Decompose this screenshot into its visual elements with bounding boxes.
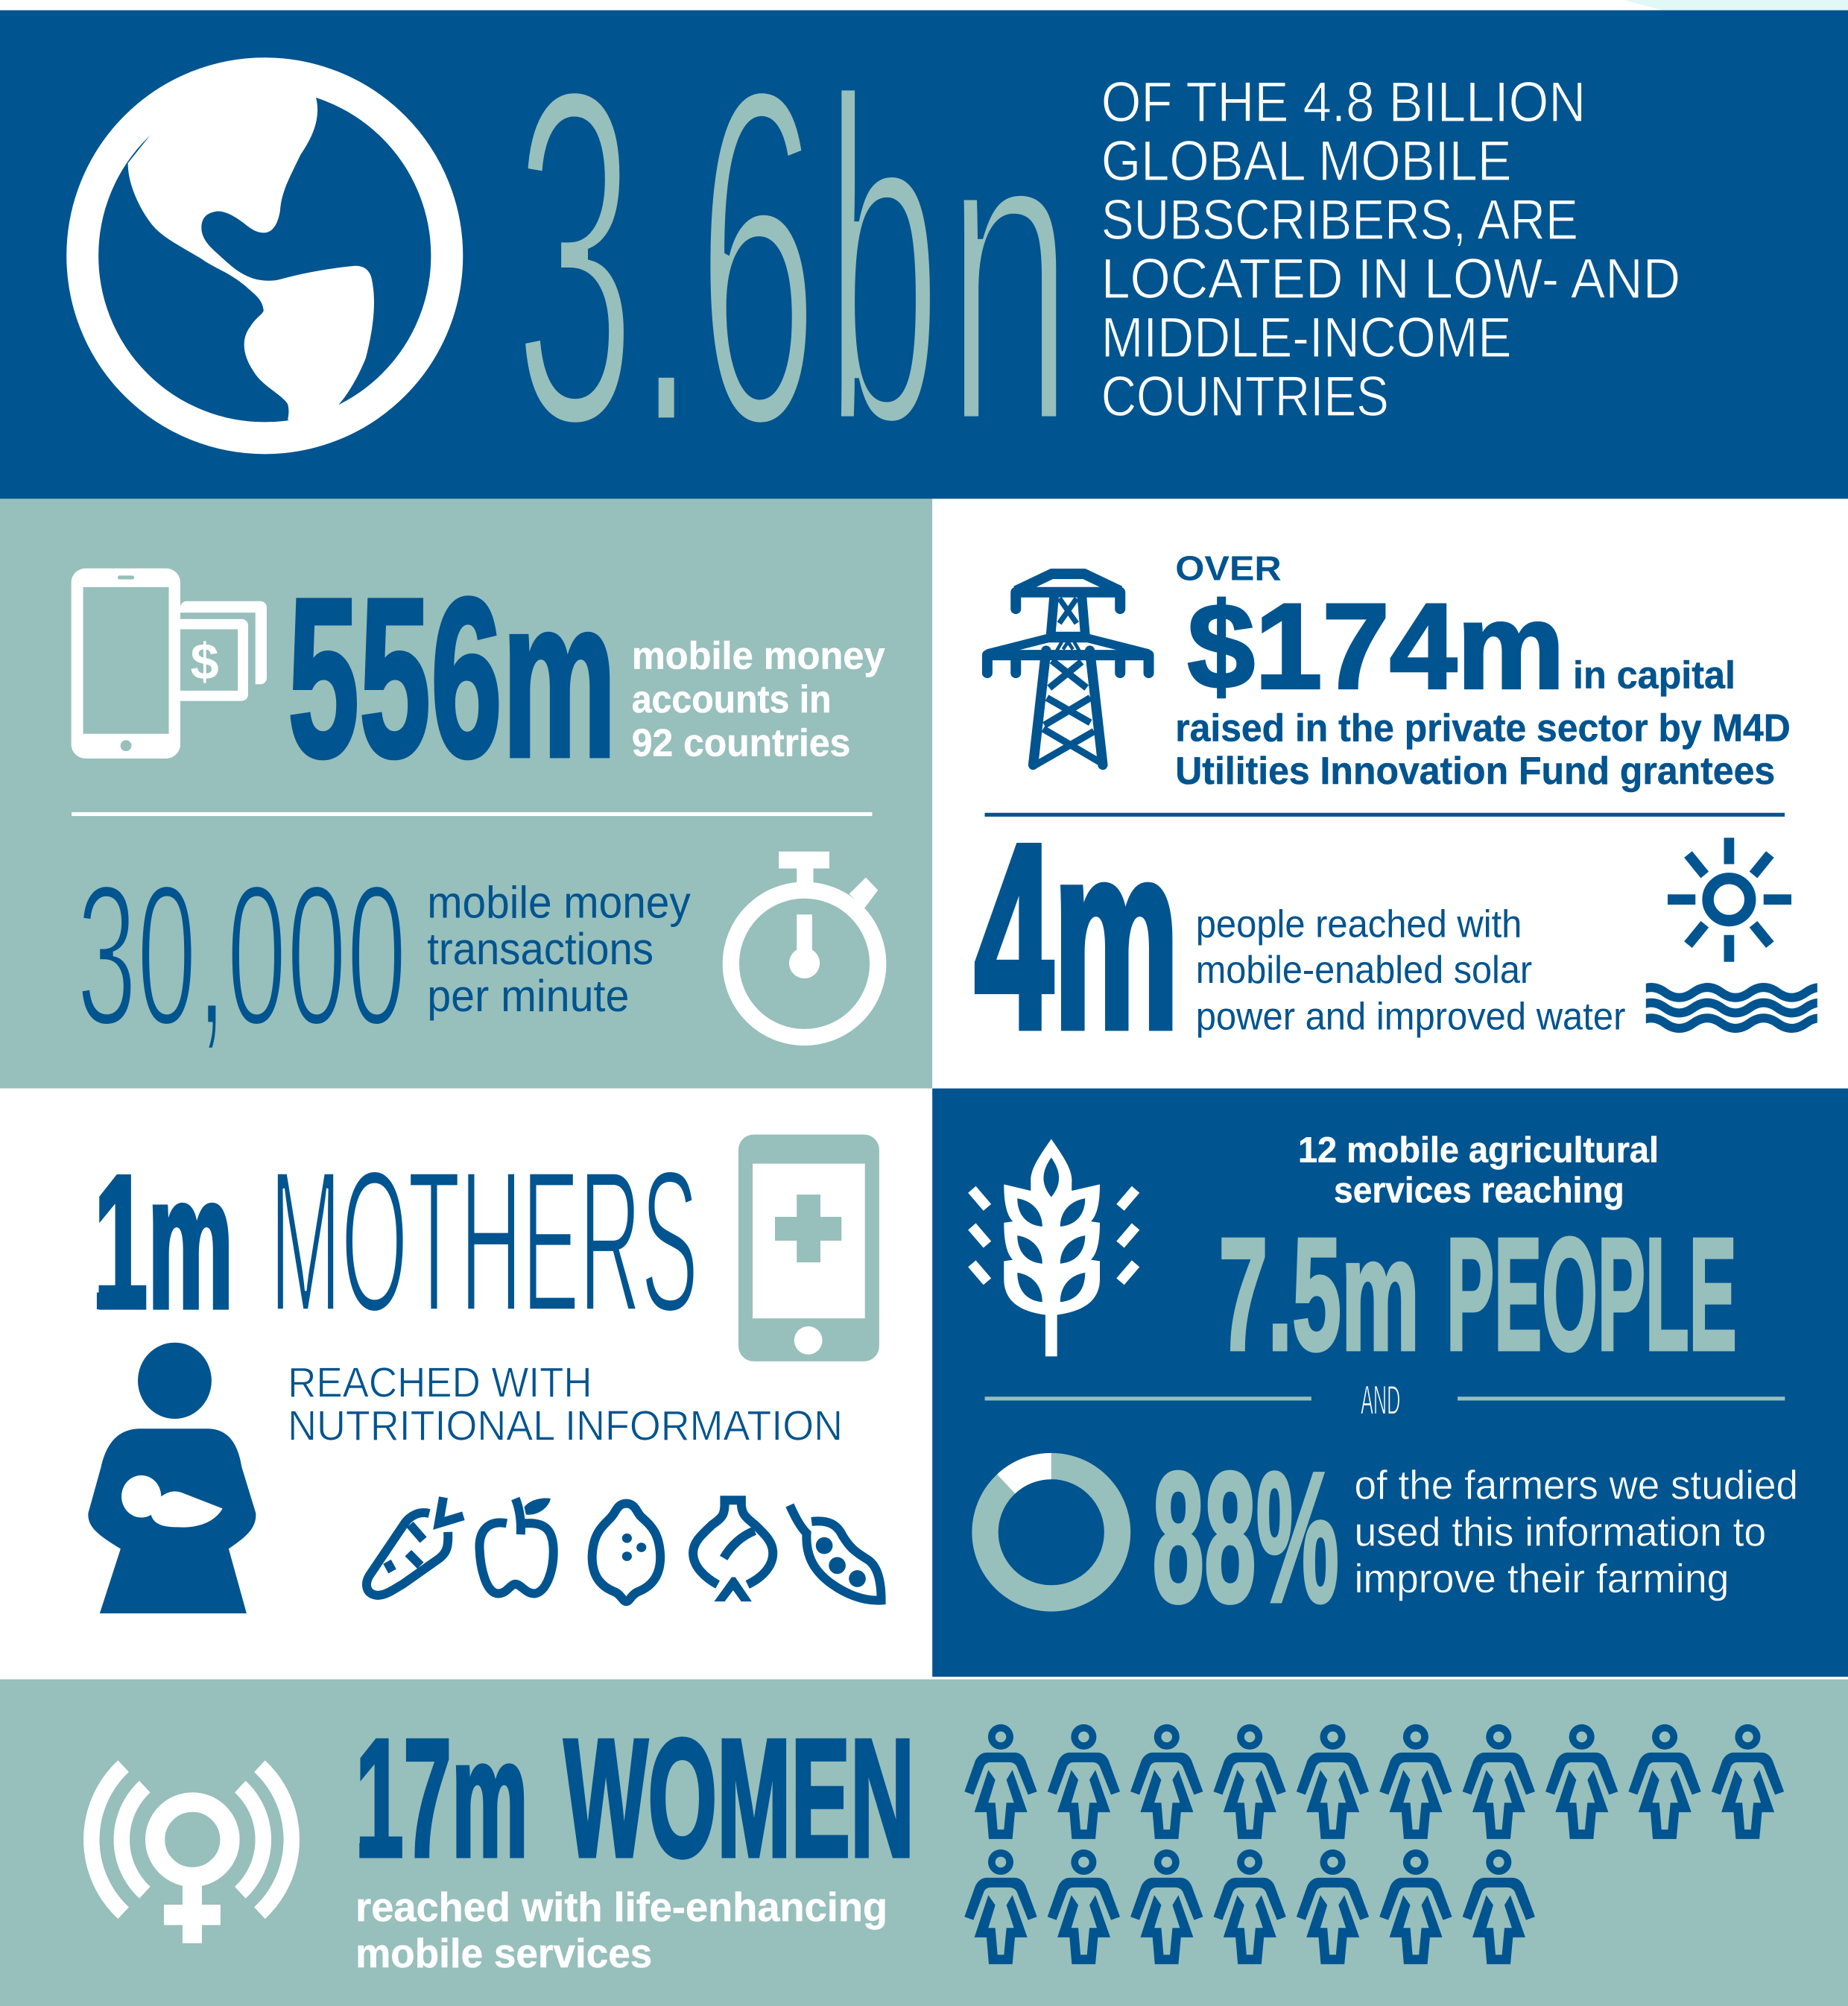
text block: reached with nutritional information bbox=[288, 1359, 843, 1450]
panel: agriculture bbox=[932, 1089, 1848, 1677]
text block: life-enhancing services: reached with life-enhancing bbox=[355, 1884, 887, 1930]
icon: stopwatch bbox=[731, 852, 878, 1037]
text block: agricultural services: services reaching bbox=[1334, 1171, 1624, 1210]
figure 1m: 1m bbox=[94, 1136, 233, 1347]
icon: phone with banknotes bbox=[72, 569, 267, 759]
icon: mother with baby bbox=[88, 1343, 256, 1613]
icon: globe bbox=[83, 74, 447, 438]
donut chart 88 percent bbox=[985, 1466, 1117, 1598]
figure 88%: 88% bbox=[1152, 1434, 1339, 1641]
figure 4m: 4m bbox=[975, 789, 1179, 1083]
text block: mobile money accounts bbox=[632, 634, 885, 764]
text block: reached with nutritional information: REACHED WITH bbox=[288, 1359, 592, 1406]
figure 17m WOMEN bbox=[355, 1703, 914, 1891]
pictogram: seventeen women bbox=[964, 1724, 1784, 1964]
text block: subscribers description bbox=[1101, 71, 1680, 428]
icon: phone with medical cross bbox=[738, 1134, 879, 1361]
label OVER: OVER bbox=[1175, 548, 1282, 587]
icon: carrot bbox=[367, 1497, 463, 1595]
big number 3.6bn: n bbox=[945, 31, 1075, 513]
text block: life-enhancing services bbox=[355, 1884, 887, 1976]
text block: transactions: transactions bbox=[427, 924, 654, 974]
figure 17m WOMEN: 17m bbox=[355, 1703, 528, 1891]
icon: sun bbox=[1668, 838, 1791, 962]
text block: solar and water bbox=[1196, 902, 1625, 1038]
text block: life-enhancing services: mobile services bbox=[355, 1930, 652, 1976]
text block: mobile money accounts: 92 countries bbox=[632, 721, 850, 764]
figure 1m bbox=[94, 1136, 233, 1347]
text block: capital raised: Utilities Innovation Fund grantees bbox=[1175, 749, 1775, 792]
figure $174m: $174m bbox=[1188, 578, 1565, 714]
text block: agricultural services: 12 mobile agricultural bbox=[1298, 1130, 1659, 1170]
big number 3.6bn: b bbox=[825, 1, 941, 521]
panel: mothers bbox=[0, 1089, 932, 1680]
panel: agriculture: AND bbox=[1361, 1376, 1400, 1423]
text block: agricultural services bbox=[1298, 1130, 1659, 1210]
text block: reached with nutritional information: NUTRITIONAL INFORMATION bbox=[288, 1403, 843, 1450]
text block: farmers: improve their farming bbox=[1355, 1555, 1729, 1601]
panel: capital and solar bbox=[932, 499, 1848, 1089]
text block: mobile money accounts: mobile money bbox=[632, 634, 885, 677]
icon: onion bbox=[693, 1500, 773, 1601]
text block: mobile money accounts: accounts in bbox=[632, 677, 832, 721]
panel: women bbox=[0, 1680, 1848, 2006]
pale corner tint bbox=[1624, 0, 1848, 10]
text block: subscribers description: COUNTRIES bbox=[1101, 365, 1389, 428]
text block: farmers: used this information to bbox=[1355, 1508, 1766, 1554]
text block: subscribers description: OF THE 4.8 BILLION bbox=[1101, 71, 1586, 134]
text block: farmers: of the farmers we studied bbox=[1355, 1462, 1798, 1508]
text block: farmers bbox=[1355, 1462, 1798, 1601]
icon: water waves bbox=[1637, 987, 1834, 1028]
text block: subscribers description: SUBSCRIBERS, ARE bbox=[1101, 189, 1578, 252]
icon: wheat bbox=[972, 1139, 1136, 1356]
icons: foods bbox=[367, 1497, 882, 1601]
text block: solar and water: mobile-enabled solar bbox=[1196, 948, 1532, 991]
text block: transactions: mobile money bbox=[427, 878, 691, 928]
text block: capital raised: in capital bbox=[1573, 653, 1735, 696]
icon: lemon bbox=[592, 1504, 660, 1601]
text block: subscribers description: MIDDLE-INCOME bbox=[1101, 306, 1512, 370]
big number 3.6bn: 3.6 bbox=[514, 0, 818, 525]
figure 7.5m PEOPLE: 7.5m bbox=[1219, 1206, 1420, 1384]
icon: apple bbox=[479, 1499, 554, 1594]
figure 17m WOMEN: WOMEN bbox=[564, 1703, 914, 1891]
figure 30,000: 30,000 bbox=[77, 844, 407, 1068]
panel: mobile money bbox=[0, 499, 932, 1089]
icon: phone with banknotes: $ bbox=[191, 633, 219, 690]
figure 556m: 556m bbox=[288, 551, 616, 804]
text block: subscribers description: GLOBAL MOBILE bbox=[1101, 130, 1512, 193]
text block: capital raised bbox=[1175, 653, 1791, 792]
text block: subscribers description: LOCATED IN LOW- AND bbox=[1101, 247, 1680, 311]
icon: pylon bbox=[987, 574, 1149, 765]
text block: solar and water: people reached with bbox=[1196, 902, 1522, 945]
text block: capital raised: raised in the private sector by M4D bbox=[1175, 706, 1791, 750]
icon: female symbol with signal waves bbox=[92, 1766, 291, 1943]
icon: pea pod bbox=[790, 1505, 882, 1601]
text block: transactions: per minute bbox=[427, 971, 629, 1021]
panel: global subscribers bbox=[0, 0, 1848, 525]
text block: transactions bbox=[427, 878, 691, 1021]
panel: mothers: MOTHERS bbox=[270, 1129, 698, 1354]
text block: solar and water: power and improved water bbox=[1196, 995, 1625, 1038]
